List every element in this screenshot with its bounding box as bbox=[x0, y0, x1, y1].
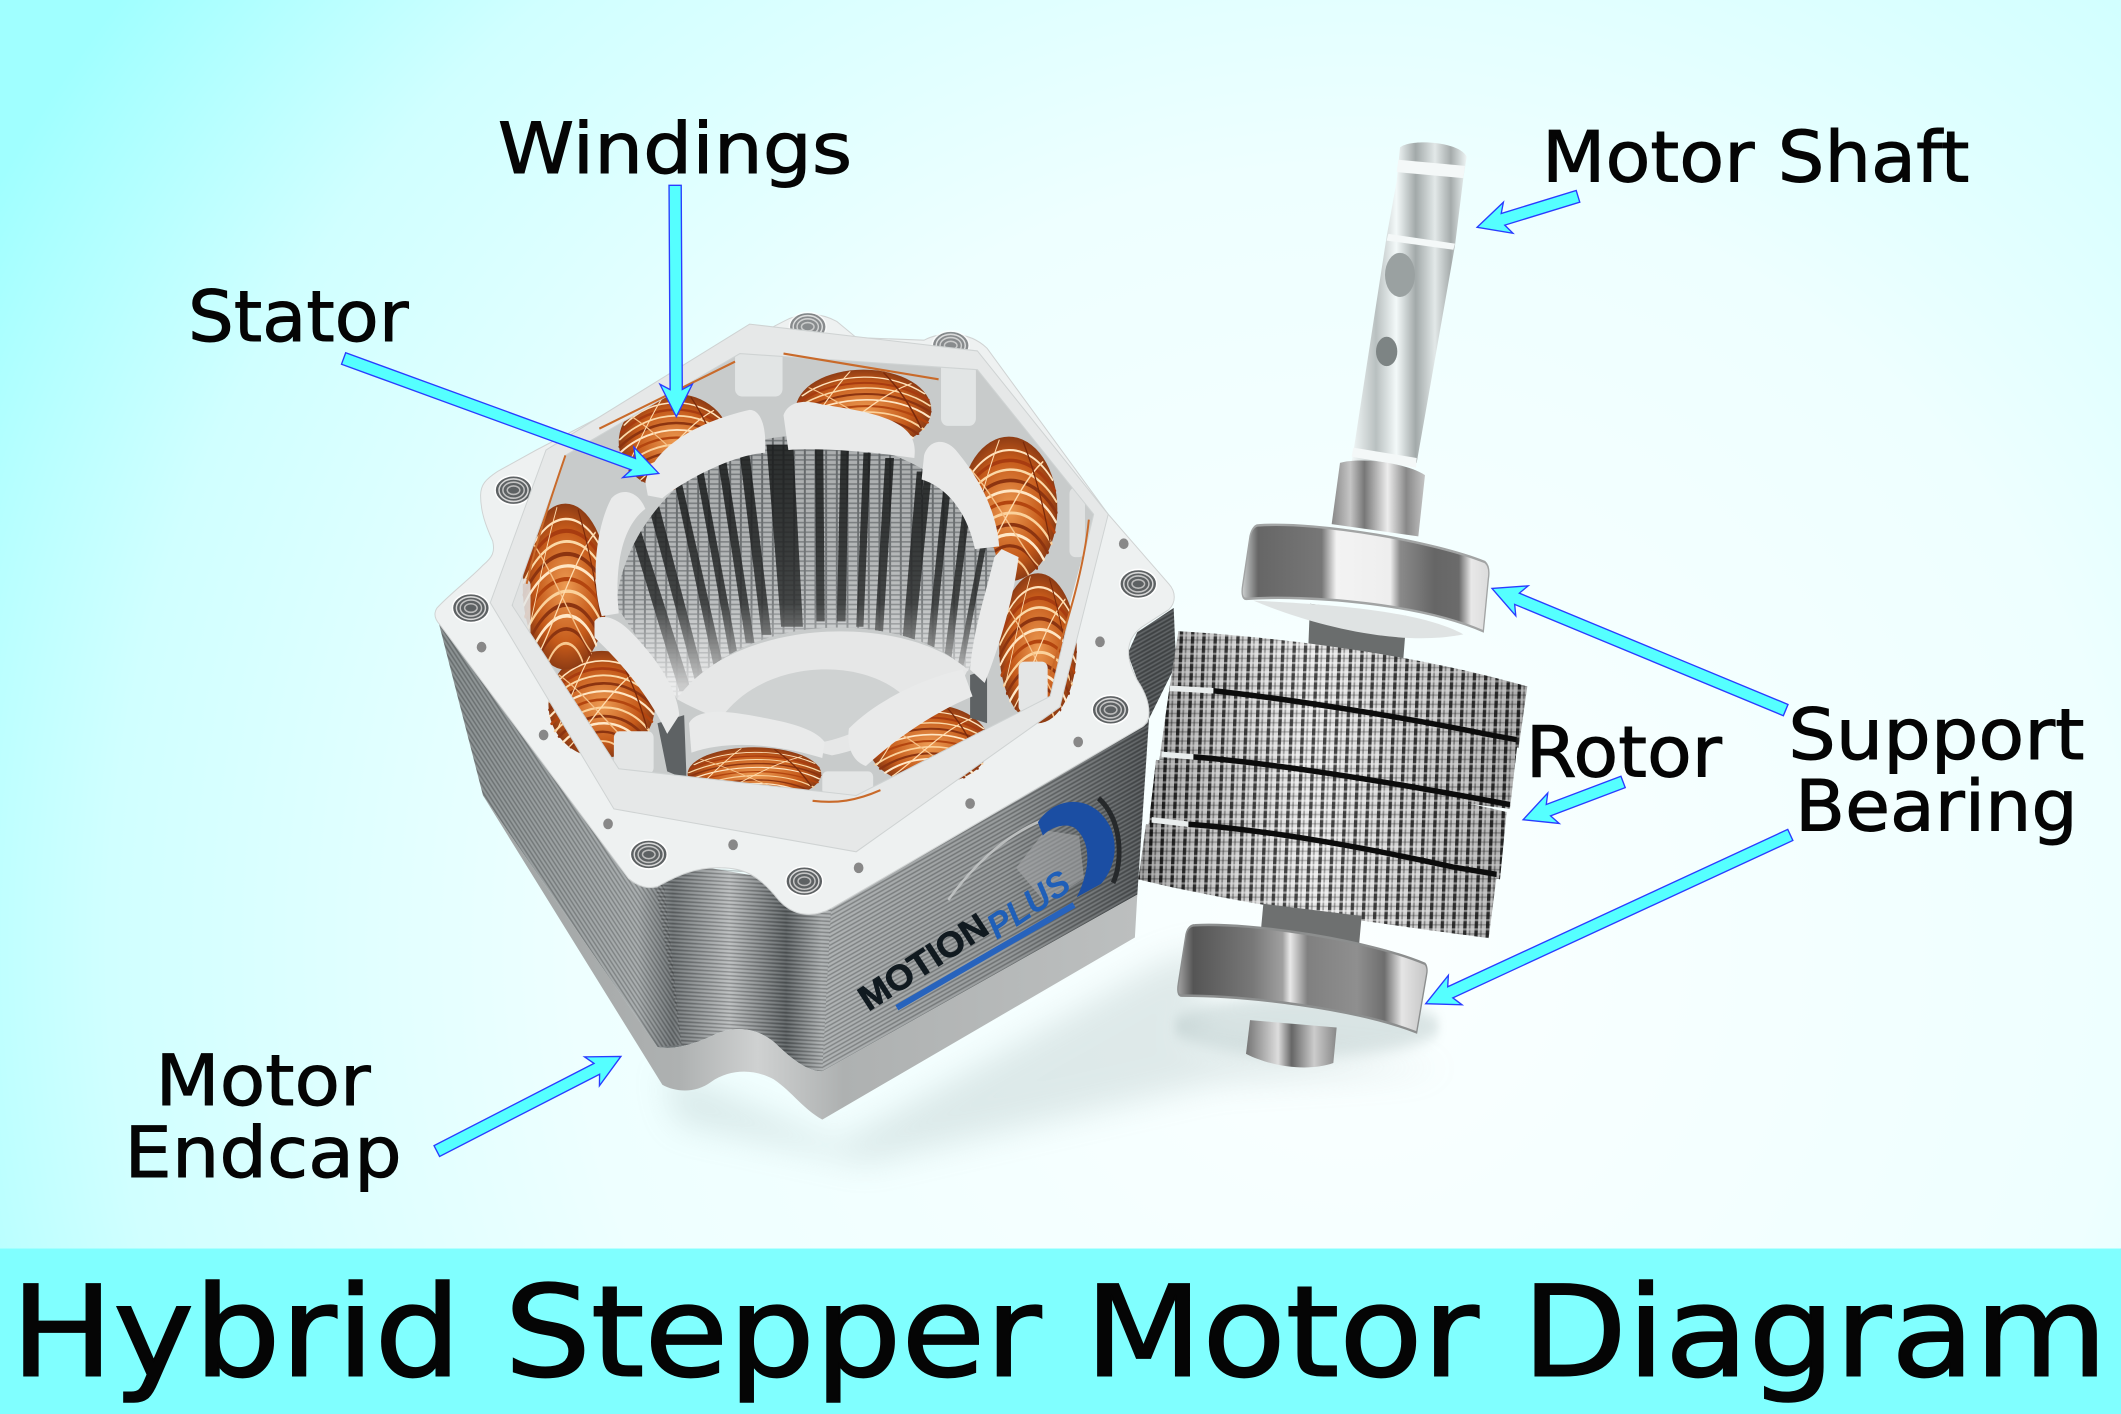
logo underline bbox=[897, 905, 1074, 1008]
stator teeth wall bbox=[618, 436, 996, 698]
insulating frame bbox=[490, 324, 1108, 852]
arrow: rotor bbox=[1517, 767, 1629, 835]
swoosh on housing bbox=[948, 798, 1119, 903]
label: motor shaft: Motor Shaft bbox=[1542, 116, 1970, 198]
stator bottom ring bbox=[677, 631, 968, 755]
arrow: motor endcap bbox=[429, 1042, 628, 1165]
label: support bearing: Support bbox=[1788, 694, 2084, 776]
shaft holes bbox=[1385, 253, 1415, 297]
stepper motor stator housing bbox=[435, 312, 1176, 1120]
motor soft shadows bbox=[663, 947, 1447, 1163]
lower bearing shadow bbox=[1173, 996, 1440, 1057]
logo wordmark plus: PLUS bbox=[980, 863, 1078, 947]
rotor toothed discs bbox=[1138, 631, 1527, 938]
label: support bearing bbox=[1788, 694, 2084, 848]
upper bearing bbox=[1242, 525, 1489, 631]
rotor seat dome bbox=[725, 669, 907, 742]
label: motor endcap: Endcap bbox=[124, 1112, 402, 1194]
title band bbox=[0, 1249, 2121, 1414]
shaft collar bbox=[1332, 461, 1425, 536]
cavity bbox=[512, 354, 1094, 814]
copper windings bbox=[523, 370, 1077, 801]
label: stator: Stator bbox=[188, 276, 409, 358]
motion plus logo bbox=[852, 863, 1078, 1019]
center shaft bbox=[1308, 604, 1407, 659]
motor endcap bbox=[483, 796, 1137, 1120]
label: support bearing: Bearing bbox=[1795, 766, 2078, 848]
lower bearing bbox=[1178, 925, 1427, 1032]
rotor and shaft assembly bbox=[1138, 142, 1527, 1067]
motor shaft bbox=[1352, 142, 1467, 463]
logo wordmark motion: MOTION bbox=[852, 906, 995, 1019]
laminate lines bbox=[437, 608, 1176, 1071]
small bobbin tabs bbox=[513, 338, 1085, 796]
arrow: motor shaft bbox=[1472, 181, 1583, 243]
label: windings: Windings bbox=[498, 108, 852, 190]
arrow: stator bbox=[338, 343, 664, 489]
bobbin end caps bbox=[594, 402, 1019, 766]
label: rotor: Rotor bbox=[1526, 711, 1722, 793]
shaft stub bbox=[1246, 1020, 1337, 1067]
lower shaft bbox=[1260, 904, 1362, 953]
mounting holes bbox=[452, 312, 1157, 896]
label: motor endcap bbox=[124, 1040, 402, 1194]
arrow: upper support bearing bbox=[1486, 573, 1792, 725]
top mounting plate bbox=[435, 314, 1174, 914]
dark stator stack corners bbox=[657, 670, 987, 779]
title: Hybrid Stepper Motor Diagram bbox=[11, 1259, 2107, 1406]
label: motor endcap: Motor bbox=[156, 1040, 371, 1122]
lead wires bbox=[527, 354, 1089, 802]
arrow: lower support bearing bbox=[1419, 820, 1797, 1018]
arrow: windings bbox=[659, 185, 693, 417]
laminated body bbox=[437, 608, 1176, 1071]
